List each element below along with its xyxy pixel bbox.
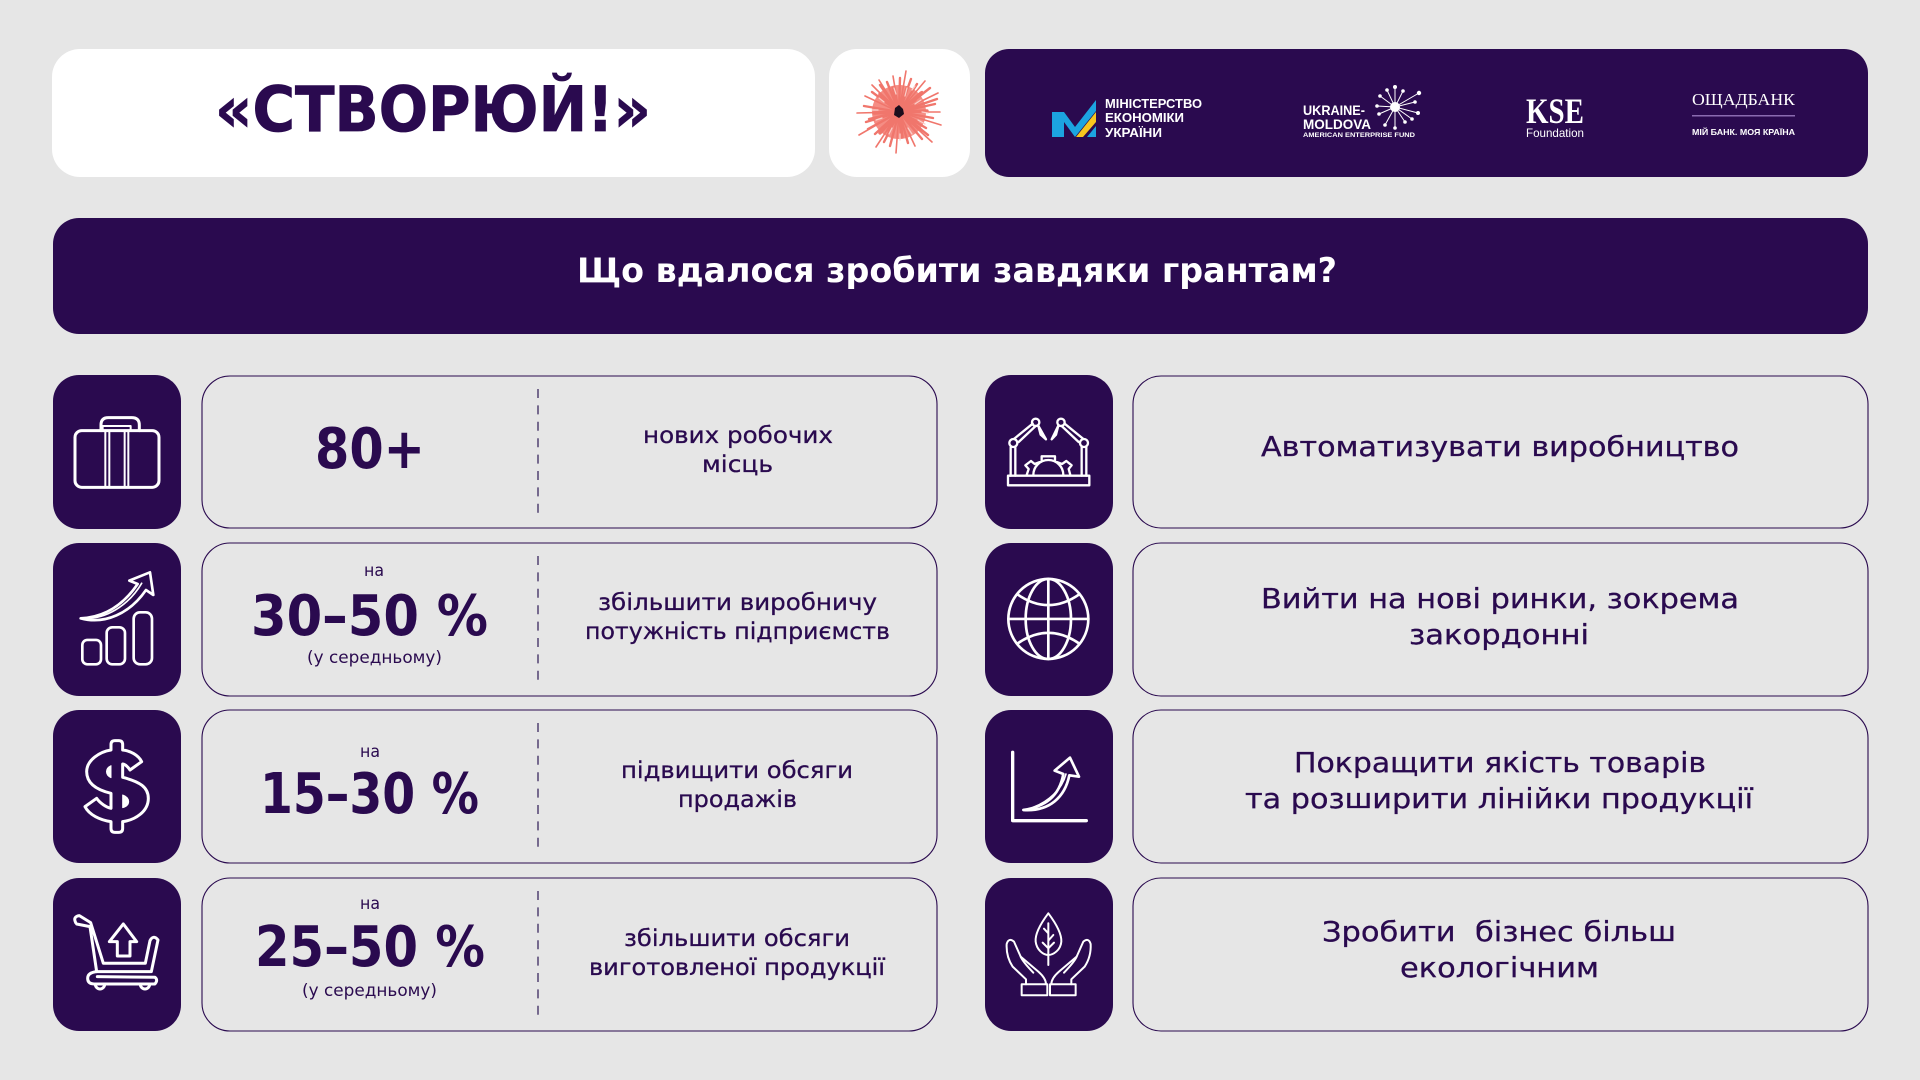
panel: sales card: продажів [678,787,797,813]
row: output [53,878,937,1031]
panel: quality card: та розширити лінійки продукції [1245,782,1753,815]
panel: eco card: екологічним [1400,951,1599,984]
row: sales [53,710,937,863]
panel: capacity card: потужність підприємств [585,619,890,645]
panel: quality card [1133,710,1868,863]
row: quality [985,710,1868,863]
panel: capacity card [202,543,937,696]
panel: capacity card: на [364,561,384,581]
icon: growth bars [53,543,181,696]
panel: capacity card: (у середньому) [307,648,442,668]
logo: ministry of economy: ЕКОНОМІКИ [1105,110,1184,125]
panel: jobs card: нових робочих [643,423,833,449]
logo: KSE foundation [1526,91,1584,140]
icon: hands holding leaf [985,878,1113,1031]
panel: automation card [1133,376,1868,528]
icon: globe [985,543,1113,696]
heading banner: Що вдалося зробити завдяки грантам? [577,251,1337,291]
icon: coral starburst [857,71,941,153]
panel: output card [202,878,937,1031]
logo: ministry of economy: УКРАЇНИ [1105,125,1162,140]
panel: eco card: Зробити бізнес більш [1322,915,1676,948]
logo: ukraine-moldova fund: UKRAINE- [1303,102,1365,118]
row: production capacity [53,543,937,696]
logo: oschadbank [1692,90,1796,137]
panel: capacity card: збільшити виробничу [598,590,877,616]
logo: KSE foundation: Foundation [1526,126,1584,140]
logo: ukraine-moldova fund [1303,85,1421,139]
logo: KSE foundation: KSE [1526,91,1584,131]
logo: ministry of economy: МІНІСТЕРСТВО [1105,96,1202,111]
panel: output card: на [360,894,380,914]
logo: ukraine-moldova fund: AMERICAN ENTERPRISE FUND [1303,133,1416,139]
panel: jobs card [202,376,937,528]
panel: automation card: Автоматизувати виробництво [1261,430,1739,463]
logo: oschadbank: МІЙ БАНК. МОЯ КРАЇНА [1692,126,1795,137]
panel: eco card [1133,878,1868,1031]
panel: markets card [1133,543,1868,696]
panel: quality card: Покращити якість товарів [1294,746,1706,779]
icon: briefcase [53,375,181,529]
panel: sales card: 15–30 % [260,762,479,827]
icon: shopping cart [53,878,181,1031]
icon: dollar [53,710,181,863]
panel: capacity card: 30–50 % [251,584,488,649]
panel: sales card: підвищити обсяги [621,758,853,784]
icon: robot arms and gear [985,375,1113,529]
row: new markets [985,543,1868,696]
panel: output card: (у середньому) [302,981,437,1001]
panel: jobs card: 80+ [315,417,425,482]
logo: ukraine-moldova fund: MOLDOVA [1303,116,1371,132]
icon: rising chart [985,710,1113,863]
row: automation [985,375,1868,529]
panel: jobs card: місць [702,452,773,478]
logo: ministry of economy [1052,96,1202,140]
row: new jobs [53,375,937,529]
row: eco [985,878,1868,1031]
panel: sales card: на [360,742,380,762]
panel: output card: 25–50 % [255,915,485,980]
panel: title card [52,49,815,177]
panel: markets card: Вийти на нові ринки, зокрема [1261,582,1739,615]
title: «СТВОРЮЙ!» [215,73,651,146]
heading banner [53,218,1868,334]
logo: oschadbank: ОЩАДБАНК [1692,90,1796,109]
panel: partner logos [985,49,1868,177]
panel: emblem card [829,49,970,177]
panel: output card: збільшити обсяги [624,926,850,952]
panel: sales card [202,710,937,863]
panel: markets card: закордонні [1409,618,1589,651]
panel: output card: виготовленої продукції [589,955,886,981]
